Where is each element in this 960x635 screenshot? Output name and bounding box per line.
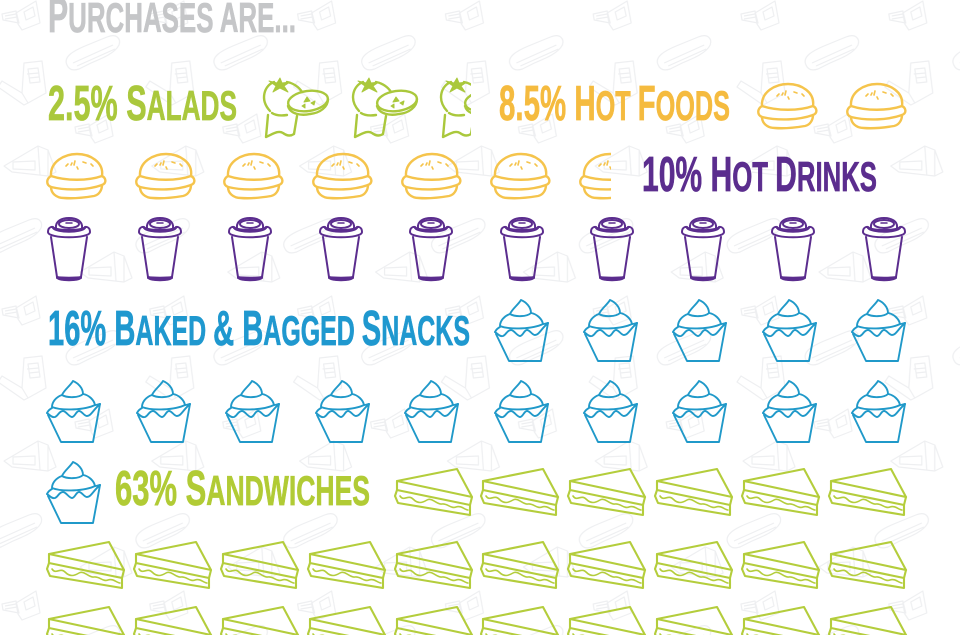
- icon: burger: [402, 154, 460, 198]
- icon: sandwich: [47, 542, 124, 588]
- icon: cup: [139, 218, 181, 280]
- icon: sandwich: [395, 469, 472, 515]
- icon: cupcake: [137, 381, 190, 442]
- icon: cup: [591, 218, 633, 280]
- icon: cup: [501, 218, 543, 280]
- icon: burger: [758, 84, 816, 128]
- icon: cupcake: [763, 381, 816, 442]
- icon: cup: [48, 218, 90, 280]
- icon: burger: [491, 154, 549, 198]
- icons: snacks second row: [47, 381, 905, 442]
- icon: cupcake: [852, 381, 905, 442]
- icon: cupcake: [495, 381, 548, 442]
- icon: sandwich: [134, 607, 211, 635]
- icon: cupcake: [584, 381, 637, 442]
- heading: sandwiches: 63% SANDWICHES: [115, 462, 370, 516]
- icon: last cupcake: [47, 462, 100, 523]
- icon: sandwich: [481, 542, 558, 588]
- icon: cupcake: [584, 300, 637, 361]
- icon: cup: [682, 218, 724, 280]
- icon: sandwich: [742, 542, 819, 588]
- icon: sandwich: [655, 469, 732, 515]
- icon: sandwich: [568, 469, 645, 515]
- icon: sandwich: [568, 542, 645, 588]
- icon: burger: [847, 84, 905, 128]
- icon: sandwich: [47, 607, 124, 635]
- icon: salad 3 (cut off): [440, 78, 471, 138]
- icons: hot drinks: [48, 218, 905, 280]
- icon: salad 2: [353, 78, 418, 137]
- icon: sandwich: [655, 542, 732, 588]
- icons: salads: [262, 78, 471, 138]
- icon: sandwich: [134, 542, 211, 588]
- icon: sandwich: [481, 469, 558, 515]
- icon: salad 1: [264, 78, 329, 137]
- icon: sandwich: [829, 607, 906, 635]
- icon: cupcake: [673, 300, 726, 361]
- icon: cupcake: [405, 381, 458, 442]
- icon: sandwich: [742, 607, 819, 635]
- icon: burger (cut off): [579, 152, 611, 200]
- icon: cup: [410, 218, 452, 280]
- icon: cupcake: [763, 300, 816, 361]
- icon: burger: [47, 154, 105, 198]
- icon: sandwich: [829, 542, 906, 588]
- icons: hot foods row: [47, 154, 638, 198]
- icon: cup: [229, 218, 271, 280]
- icon: burger: [224, 154, 282, 198]
- icon: sandwich: [481, 607, 558, 635]
- icons: sandwiches top row: [395, 469, 906, 515]
- icon: sandwich: [655, 607, 732, 635]
- icon: sandwich: [221, 607, 298, 635]
- icon: cupcake: [852, 300, 905, 361]
- icon: cup: [863, 218, 905, 280]
- heading: hot drinks: 10% HOT DRINKS: [642, 148, 877, 202]
- icon: sandwich: [395, 607, 472, 635]
- icon: burger: [313, 154, 371, 198]
- icon: sandwich: [742, 469, 819, 515]
- icon: cupcake: [673, 381, 726, 442]
- icon: sandwich: [308, 542, 385, 588]
- icon: sandwich: [829, 469, 906, 515]
- icon: cup: [320, 218, 362, 280]
- heading: baked and bagged snacks: 16% BAKED & BAGGED SNACKS: [48, 302, 470, 356]
- icon: sandwich: [308, 607, 385, 635]
- heading: hot foods: 8.5% HOT FOODS: [499, 77, 730, 131]
- heading: salads: 2.5% SALADS: [48, 77, 237, 131]
- icons: snacks top row: [495, 300, 905, 361]
- icon: sandwich: [221, 542, 298, 588]
- icon: burger: [136, 154, 194, 198]
- icon: sandwich: [395, 542, 472, 588]
- icons: sandwiches second row: [47, 542, 906, 588]
- icon: cup: [772, 218, 814, 280]
- icons: sandwiches third row: [47, 607, 906, 635]
- icon: sandwich: [568, 607, 645, 635]
- icon: cupcake: [316, 381, 369, 442]
- icons: hot foods top: [758, 84, 905, 128]
- icon: cupcake: [226, 381, 279, 442]
- icon: cupcake: [47, 381, 100, 442]
- icon: cupcake: [495, 300, 548, 361]
